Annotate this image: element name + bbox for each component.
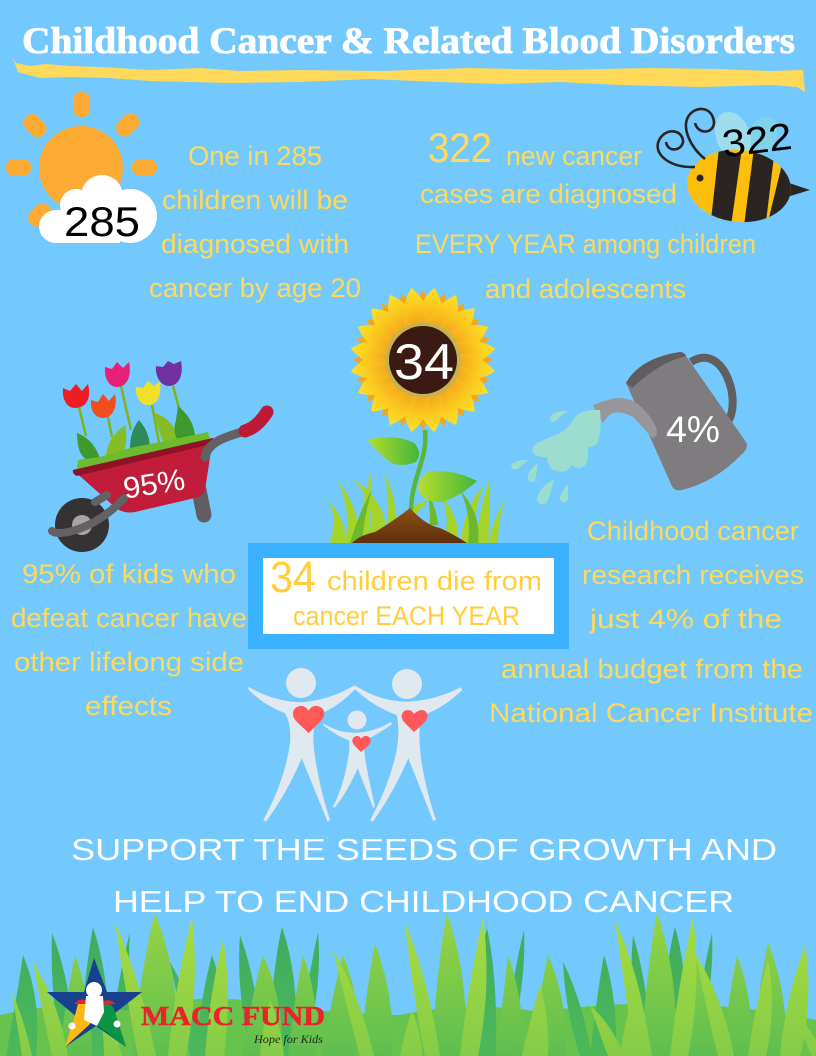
- logo tagline: Hope for Kids: [253, 1032, 323, 1046]
- callout box: cancer EACH YEAR: [293, 601, 520, 631]
- number 322 on bee: 322: [720, 116, 794, 166]
- panel: watering can statistic: [489, 352, 813, 728]
- barrow handles: [52, 495, 124, 533]
- icon: wheelbarrow with tulips: [52, 361, 267, 552]
- title: Childhood Cancer & Related Blood Disorders: [22, 21, 795, 62]
- text: research budget: National Cancer Institute: [489, 698, 813, 728]
- hearts: [293, 706, 428, 752]
- text: one in 285: children will be: [162, 185, 348, 215]
- text: one in 285: diagnosed with: [161, 229, 349, 259]
- can spout: [593, 398, 657, 438]
- wheel: [55, 498, 109, 552]
- icon: bee: [658, 107, 810, 227]
- can handle: [691, 358, 733, 420]
- flower grass: [327, 470, 505, 543]
- text: research budget: research receives: [582, 560, 804, 590]
- flower leaves: [367, 437, 419, 465]
- flower stem: [411, 430, 425, 510]
- text: 95% of kids: defeat cancer have: [11, 603, 247, 633]
- text: 322 new cancer cases: [415, 124, 756, 304]
- text: 95% of kids: effects: [85, 691, 172, 721]
- panel: wheelbarrow statistic: [11, 361, 267, 721]
- number 4% on can: 4%: [666, 409, 720, 450]
- icon: family with hearts: [248, 668, 462, 822]
- text: 95% of kids: [11, 559, 247, 721]
- soil mound: [352, 508, 467, 543]
- closing call to action: SUPPORT THE SEEDS OF GROWTH AND: [71, 832, 777, 867]
- panel: sunflower statistic: [248, 286, 569, 649]
- tulip stems and leaves: [77, 386, 210, 470]
- flower disk: [385, 322, 461, 398]
- outer orange petals: [353, 290, 493, 430]
- text: one in 285: [149, 141, 361, 303]
- text: 95% of kids: other lifelong side: [14, 647, 244, 677]
- logo wordmark: MACC FUND: [141, 1001, 325, 1031]
- panel: bee statistic: [415, 107, 810, 304]
- text: 322 new cancer cases: EVERY YEAR among children: [415, 229, 756, 259]
- number 34 on flower: 34: [394, 334, 454, 390]
- closing call to action: HELP TO END CHILDHOOD CANCER: [113, 884, 734, 919]
- can body: [626, 352, 747, 490]
- callout box: 34: [270, 553, 316, 602]
- grass border: [0, 912, 816, 1056]
- text: 322 new cancer cases: cases are diagnosed: [420, 179, 677, 209]
- text: research budget: Childhood cancer: [587, 516, 799, 546]
- closing call to action: [71, 832, 777, 919]
- number 285: 285: [64, 198, 140, 245]
- text: one in 285: One in 285: [188, 141, 322, 171]
- text: research budget: just 4% of the: [589, 604, 782, 634]
- text: research budget: annual budget from the: [501, 654, 803, 684]
- text: 322 new cancer cases: and adolescents: [485, 274, 686, 304]
- icon: watering can: [511, 352, 747, 504]
- icon: sun: [6, 92, 157, 230]
- callout box: [248, 543, 569, 649]
- title brush underline: [13, 58, 805, 92]
- text: 95% of kids: 95% of kids who: [22, 559, 236, 589]
- inner yellow petals: [349, 286, 497, 434]
- text: one in 285: cancer by age 20: [149, 273, 361, 303]
- logo star: [47, 958, 142, 1047]
- number 95% on barrow: 95%: [121, 463, 187, 506]
- callout box: children die from: [327, 566, 542, 596]
- icon: cloud: [39, 175, 157, 243]
- icon: sunflower: [327, 286, 505, 543]
- barrow rear leg: [199, 490, 204, 515]
- water splash: [511, 410, 601, 504]
- text: 322 new cancer cases: new cancer: [506, 141, 642, 171]
- text: 322 new cancer cases: 322: [428, 124, 492, 171]
- text: research budget: [489, 516, 813, 728]
- tulip blooms: [63, 384, 89, 408]
- logo: MACC Fund: [47, 958, 325, 1047]
- panel: sun statistic: [6, 92, 361, 303]
- barrow tray: [73, 438, 213, 512]
